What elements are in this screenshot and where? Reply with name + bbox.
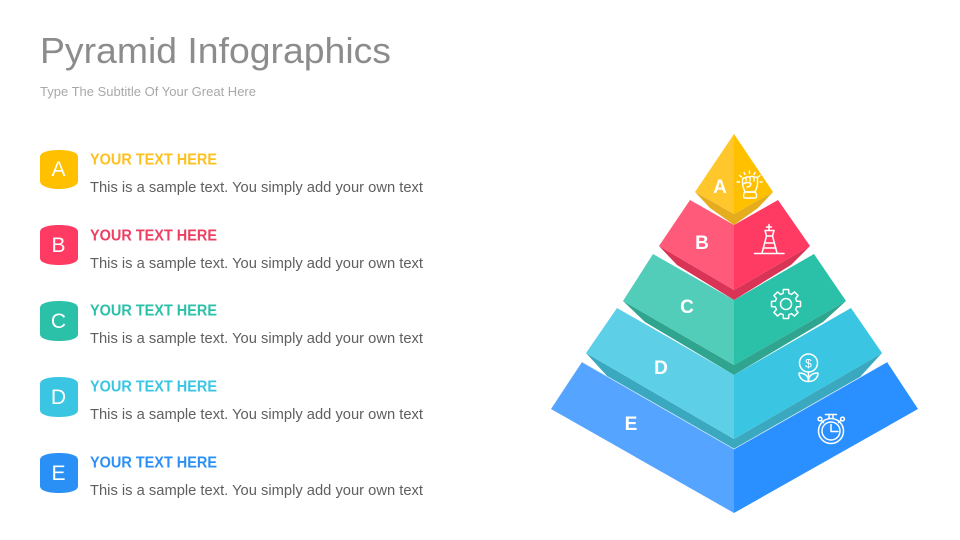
icon: gear	[772, 290, 800, 318]
tier D: D	[654, 358, 668, 379]
icon: money plant	[799, 354, 818, 382]
tier A: A	[713, 177, 727, 198]
badge B	[40, 225, 78, 265]
tier B	[659, 200, 810, 300]
description E: This is a sample text. You simply add your own text	[90, 483, 423, 499]
heading E: YOUR TEXT HERE	[90, 454, 217, 472]
tier B: B	[695, 233, 709, 254]
badge D: D	[51, 386, 66, 409]
badge E: E	[51, 462, 66, 485]
edge highlight	[582, 362, 887, 449]
badge C: C	[51, 310, 66, 333]
icon: stopwatch	[818, 414, 844, 444]
list item E	[40, 453, 423, 499]
description A: This is a sample text. You simply add your own text	[90, 180, 423, 196]
description D: This is a sample text. You simply add your own text	[90, 407, 423, 423]
list item A	[40, 150, 423, 196]
tier A	[695, 134, 773, 225]
badge B: B	[51, 234, 66, 257]
list item C	[40, 301, 423, 347]
description C: This is a sample text. You simply add your own text	[90, 331, 423, 347]
tier E: E	[625, 414, 637, 435]
heading C: YOUR TEXT HERE	[90, 302, 217, 320]
badge E	[40, 453, 78, 493]
description B: This is a sample text. You simply add your own text	[90, 256, 423, 272]
heading D: YOUR TEXT HERE	[90, 378, 217, 396]
tier E	[551, 362, 918, 513]
tier D	[582, 308, 887, 449]
heading A: YOUR TEXT HERE	[90, 152, 217, 168]
list item D	[40, 377, 423, 423]
heading B: YOUR TEXT HERE	[90, 228, 217, 244]
tier C	[623, 254, 846, 375]
badge D	[40, 377, 78, 417]
title: Pyramid Infographics	[40, 30, 391, 71]
subtitle: Type The Subtitle Of Your Great Here	[40, 84, 256, 99]
badge A	[40, 150, 78, 189]
pyramid	[551, 134, 918, 513]
icon: money plant: $	[805, 356, 812, 370]
badge C	[40, 301, 78, 341]
icon: fist	[737, 171, 762, 198]
list item B	[40, 225, 423, 272]
badge A: A	[51, 158, 66, 181]
tier C: C	[680, 297, 694, 318]
icon: chess king	[754, 224, 784, 254]
